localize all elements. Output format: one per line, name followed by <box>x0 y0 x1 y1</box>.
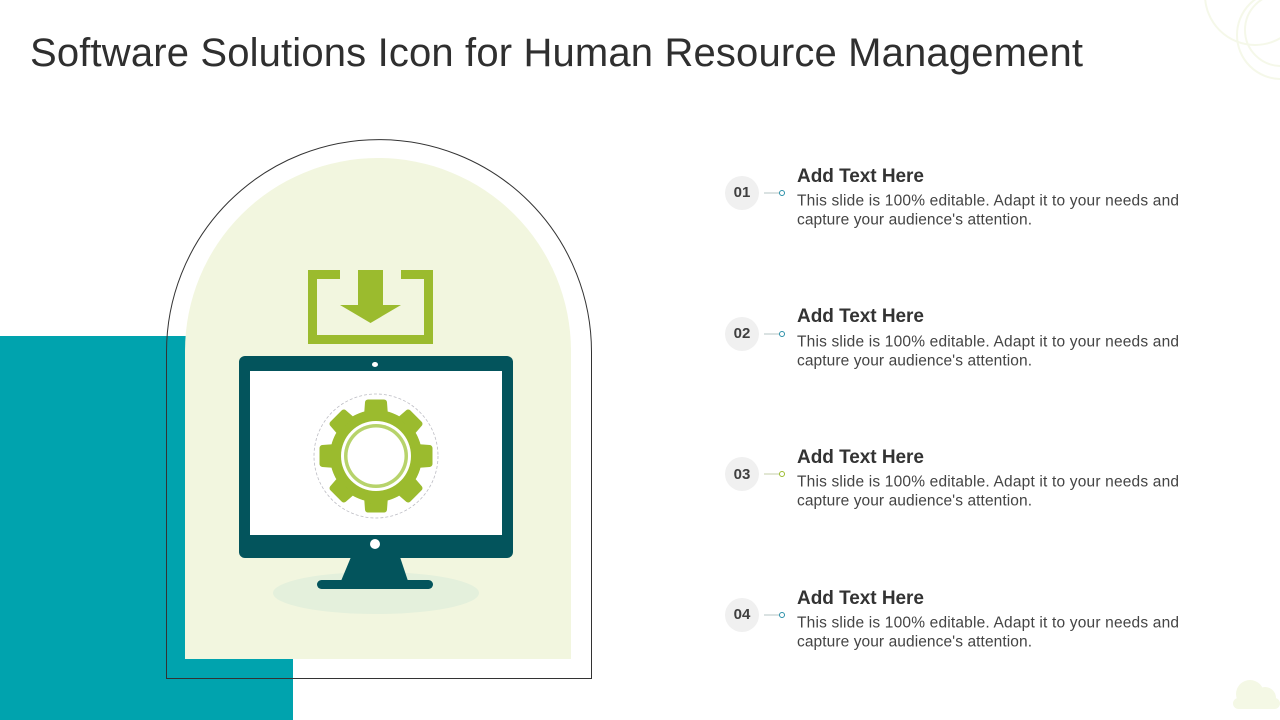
icon: monitor <box>239 356 513 589</box>
item 04: This slide is 100% editable. Adapt it to your needs and <box>797 614 1179 632</box>
arch outline <box>166 140 592 678</box>
item 04 <box>725 588 1179 650</box>
item 04: capture your audience's attention. <box>797 634 1032 650</box>
item 01 <box>725 166 1179 228</box>
item 03: Add Text Here <box>797 447 924 468</box>
item 03: 03 <box>734 466 750 483</box>
teal background block <box>0 336 293 720</box>
item 01: capture your audience's attention. <box>797 212 1032 228</box>
item 02: Add Text Here <box>797 306 924 327</box>
item 03: This slide is 100% editable. Adapt it to your needs and <box>797 474 1179 490</box>
item 04: 04 <box>734 606 751 623</box>
item 03: capture your audience's attention. <box>797 492 1032 510</box>
decorative circles top right <box>1205 0 1280 79</box>
icon: gear <box>314 394 438 518</box>
item 01: Add Text Here <box>797 166 924 187</box>
item 01: This slide is 100% editable. Adapt it to your needs and <box>797 192 1179 210</box>
icon: download tray with arrow <box>308 270 433 344</box>
title: Software Solutions Icon for Human Resource Management <box>30 31 1083 75</box>
item 02: capture your audience's attention. <box>797 352 1032 370</box>
item 02: 02 <box>734 325 750 342</box>
monitor shadow <box>273 572 479 614</box>
item 04: Add Text Here <box>797 588 924 609</box>
pale arch panel <box>185 158 571 659</box>
item 02: This slide is 100% editable. Adapt it to your needs and <box>797 334 1179 350</box>
item 01: 01 <box>734 184 750 201</box>
item 02 <box>725 306 1179 370</box>
decorative cloud bottom right <box>1233 680 1280 709</box>
item 03 <box>725 447 1179 510</box>
